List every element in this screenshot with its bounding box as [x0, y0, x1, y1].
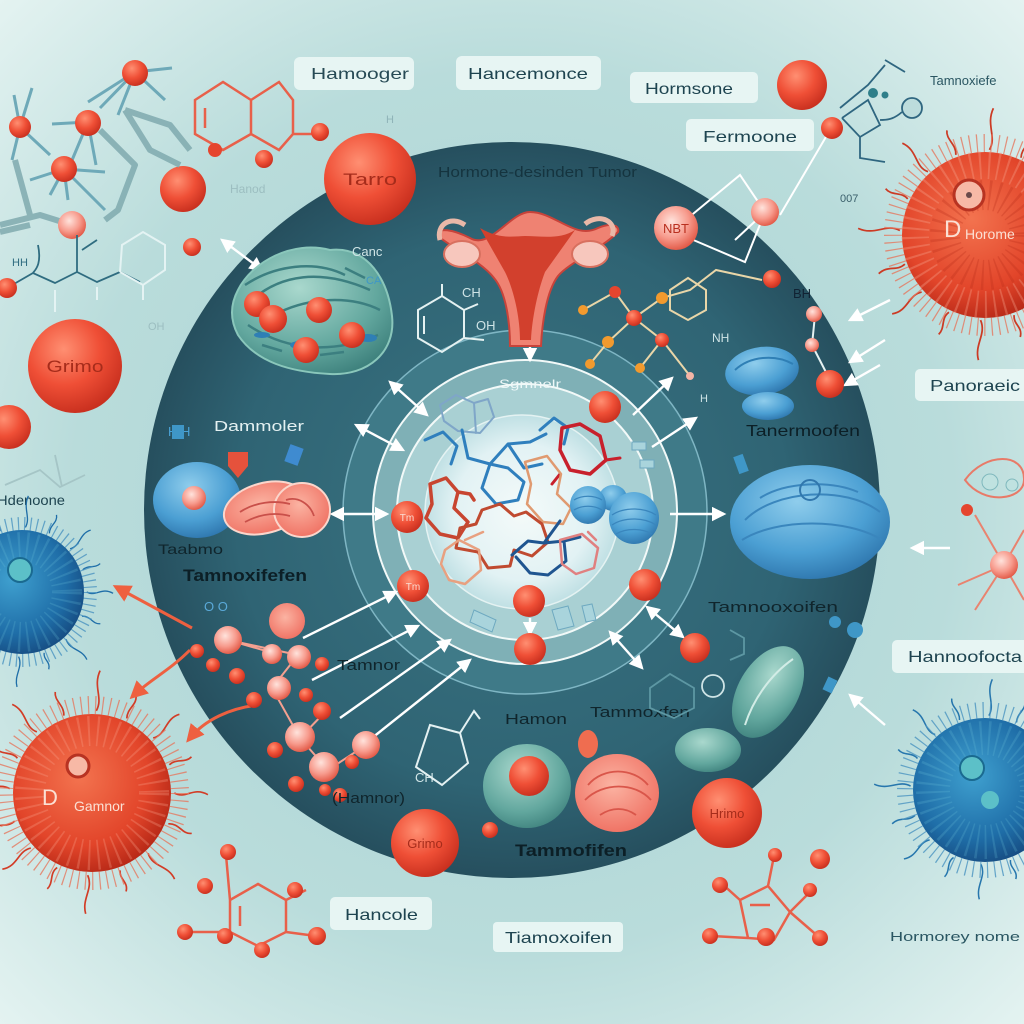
red sphere: top right [777, 60, 827, 110]
structure: ring molecule [418, 284, 484, 352]
red sphere: Tarro [324, 133, 416, 225]
icon: uterus [438, 212, 618, 346]
small chem labels: Canc [352, 244, 383, 259]
red sphere: Grimo [28, 319, 122, 413]
label: Hamooger: Hamooger [311, 66, 410, 83]
molecule: pink hub with label: NBT [663, 221, 689, 236]
acid formula left [5, 455, 85, 487]
red chains and arrows at left [118, 588, 380, 802]
label: center: Sgmnelr [499, 377, 561, 391]
label: Tamnoxiefe: Tamnoxiefe [930, 73, 996, 88]
arrows: white [222, 240, 950, 738]
molecule: top left network [0, 60, 265, 333]
labels: left interior: Tamnor [337, 657, 400, 674]
red node on rings: Tm [400, 513, 414, 524]
red node on rings: Tm [406, 582, 420, 593]
blue discs at center [570, 485, 659, 544]
red sphere: Grimo bottom: Grimo [407, 836, 443, 851]
molecule: right top [840, 60, 922, 162]
label: Hancemonce [456, 56, 601, 90]
cell: red bottom left: D [42, 785, 58, 810]
tissue: green rock with red nodules [232, 248, 392, 374]
crystals [470, 442, 654, 632]
small chem labels: CA [366, 275, 382, 287]
label: Hancole: Hancole [345, 907, 418, 924]
cell: red bottom left [0, 671, 208, 914]
red dot [482, 822, 498, 838]
molecule: top left network: OH [148, 321, 165, 333]
label: Hormsone: Hormsone [645, 81, 733, 98]
molecule: top left network: HH [12, 257, 28, 269]
labels: left interior: Dammoler [214, 418, 304, 435]
red sphere: small [183, 238, 201, 256]
small chem labels: BH [793, 286, 811, 301]
molecule: pink hub with label [654, 117, 843, 262]
hexagon bottom center [416, 711, 480, 785]
blue discs right [172, 342, 890, 693]
molecule: bottom left [177, 844, 326, 958]
labels: left interior: O O [204, 599, 228, 614]
label: Hannoofocta [892, 640, 1024, 673]
red sphere: Hrimo [692, 778, 762, 848]
central molecular network [425, 395, 620, 584]
small chem labels: NH [712, 331, 729, 345]
label: Tiamoxoifen [493, 922, 623, 952]
small molecules right [805, 306, 1024, 610]
molecule: top left network: Hanod [230, 182, 265, 196]
molecule: orange-red cluster [578, 270, 781, 380]
cell: red top right [858, 108, 1024, 360]
labels: left interior: (Hamnor) [332, 790, 405, 807]
cell: blue bottom right [874, 679, 1024, 899]
small chem labels [352, 244, 811, 785]
small chem labels: H [700, 393, 708, 405]
labels: left interior: H H [168, 424, 190, 439]
label: Hamooger [294, 57, 414, 90]
labels: left interior: Tanermoofen [746, 423, 860, 440]
red sphere [160, 166, 206, 212]
labels: left interior: Tamnoxifefen [183, 566, 307, 585]
cell: red top right: D [944, 216, 961, 243]
cell: blue left [0, 496, 113, 687]
molecule: top double ring [195, 82, 394, 168]
panel: inner concentric rings [343, 330, 707, 694]
red sphere: Grimo bottom [391, 809, 459, 877]
red node on rings [391, 391, 710, 665]
label: Fermoone: Fermoone [703, 129, 797, 146]
label: Hormsone [630, 72, 758, 103]
labels: left interior: Hamon [505, 711, 567, 728]
label: Fermoone [686, 119, 814, 151]
small chem labels: OH [476, 318, 496, 333]
label: Hancole [330, 897, 432, 930]
labels: left interior: Tammofifen [515, 841, 627, 860]
label: Panoraeic [915, 369, 1024, 401]
bottom pills [483, 634, 819, 832]
red sphere: Grimo: Grimo [46, 357, 104, 376]
red sphere: Hrimo: Hrimo [710, 806, 744, 821]
small chem labels: CH [462, 285, 481, 300]
label: Hormorey: Hormorey nome [890, 929, 1020, 944]
heading: tumor: Hormone-desinden Tumor [438, 164, 637, 181]
cell: red top right: Horome [965, 226, 1015, 242]
small chem labels: CH [415, 770, 434, 785]
labels: left interior: Taabmo [158, 541, 223, 557]
red sphere: Tarro: Tarro [343, 170, 397, 189]
label: code: 007 [840, 193, 858, 205]
labels: left interior [158, 418, 860, 860]
label: Panoraeic: Panoraeic [930, 378, 1020, 395]
molecule: top double ring: H [386, 114, 394, 126]
labels: left interior: Tammoxfen [590, 704, 690, 721]
blue-and-salmon discs left [153, 452, 330, 543]
molecule: bottom right [702, 848, 830, 946]
labels: left interior: Tamnooxoifen [708, 599, 838, 616]
cell: red bottom left: Gamnor [74, 798, 125, 814]
label: Tiamoxoifen: Tiamoxoifen [505, 930, 612, 947]
label: Hancemonce: Hancemonce [468, 66, 588, 83]
red sphere: left edge [0, 405, 31, 449]
molecule: lower right inside [650, 616, 863, 718]
label: Hannoofocta: Hannoofocta [908, 649, 1022, 666]
panel: central dark circle [144, 142, 880, 878]
